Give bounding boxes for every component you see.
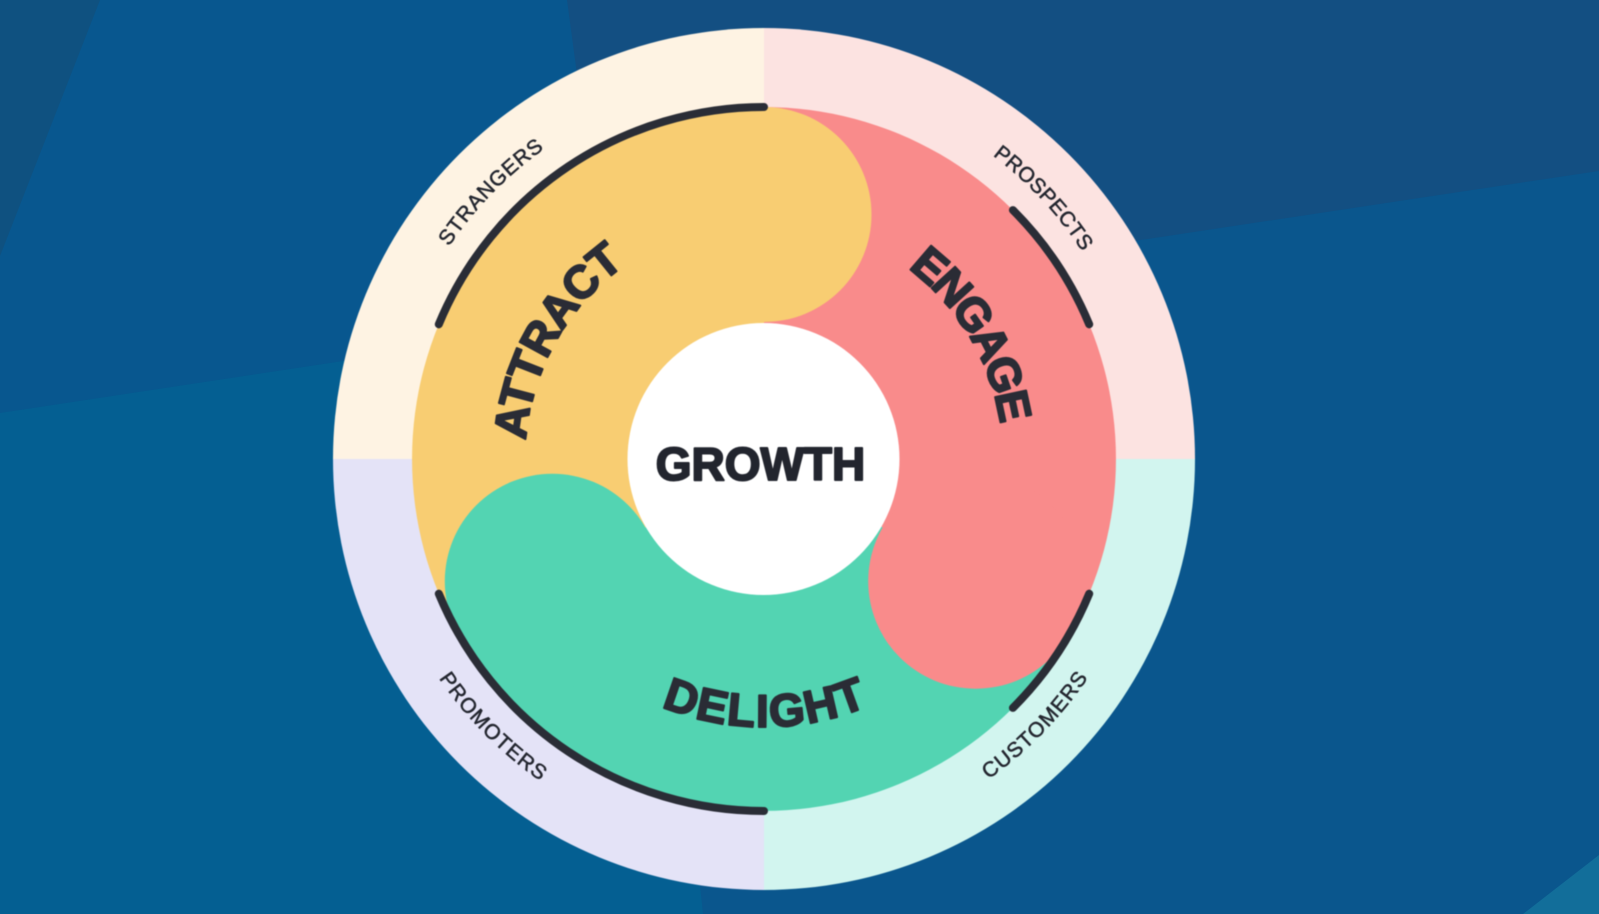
flywheel diagram [332,27,1196,891]
arc bar: prospects [1013,210,1089,324]
label: PROMOTERS: PROMOTERS [439,670,548,780]
label: STRANGERS: STRANGERS [438,138,543,246]
centre heading: GROWTH: GROWTH [656,438,865,490]
heading: ENGAGE: ENGAGE [908,244,1033,424]
arc bar: promoters [439,594,764,811]
label: CUSTOMERS: CUSTOMERS [982,671,1087,778]
heading: ATTRACT: ATTRACT [494,238,618,441]
arc bar: customers [1013,594,1089,708]
outer ring: four pastel quadrants [333,28,1195,890]
label: PROSPECTS: PROSPECTS [993,144,1094,250]
heading: DELIGHT: DELIGHT [662,675,860,729]
centre circle [628,323,900,595]
inner swirl: yellow, pink and green segments [412,107,1116,811]
arc bar: strangers [439,107,764,324]
